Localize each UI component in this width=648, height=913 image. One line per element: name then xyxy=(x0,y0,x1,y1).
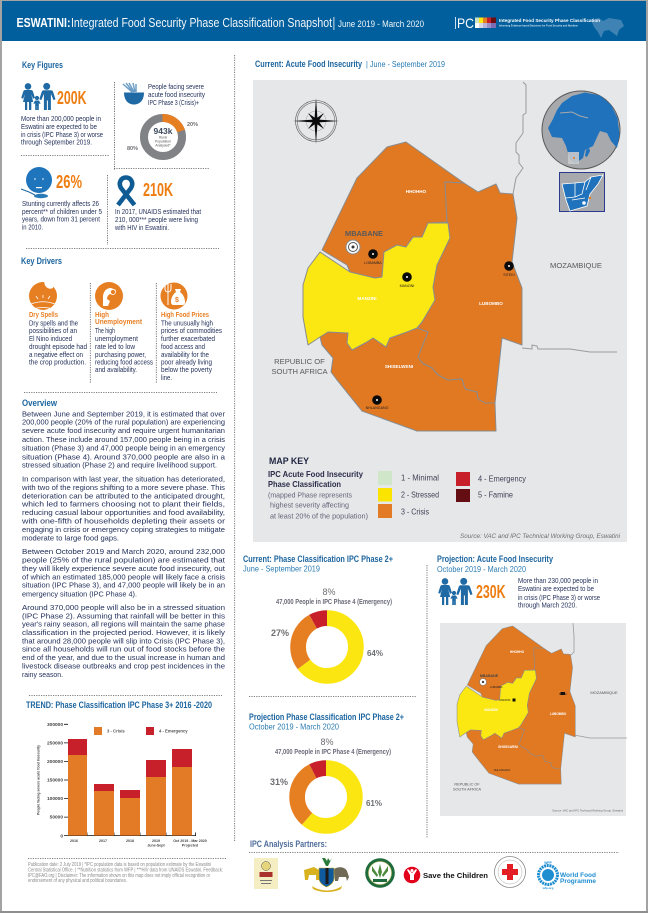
driver: dry spells: drought episode had xyxy=(29,342,87,351)
map key: IPC Acute Food Insecurity xyxy=(268,469,363,479)
map key: 5 - Famine xyxy=(478,490,514,500)
text: overview paragraph 1: severe acute food insecurity and require urgent humanitarian xyxy=(22,426,225,435)
text: overview paragraph 4 xyxy=(22,603,225,679)
globe locator xyxy=(542,91,620,169)
map key: 4 - Emergency xyxy=(478,474,526,484)
markers: small map cities xyxy=(480,678,565,702)
donut chart: projection: 8% xyxy=(320,737,334,747)
map labels: SHISELWENI xyxy=(385,364,413,369)
text: people facing severe: People facing severe xyxy=(148,82,204,91)
text: 200K explanation: in crisis (IPC Phase 3) or worse xyxy=(21,130,103,139)
icon: dry spells xyxy=(29,279,57,310)
heading: current classification xyxy=(243,554,393,574)
text: HIV: with HIV in Eswatini. xyxy=(114,223,169,232)
driver: high unemployment: reducing food access xyxy=(95,358,153,366)
heading: current classification: June - September 2019 xyxy=(243,564,320,574)
text: overview paragraph 4: end of the year, and due to the usual increase in human and xyxy=(22,653,225,662)
dotted layout dividers xyxy=(235,55,427,842)
chart legend: 3 - Crisis xyxy=(107,728,125,734)
panel: trend chart xyxy=(26,700,212,848)
map labels xyxy=(453,650,623,812)
text: 230K explanation: through March 2020. xyxy=(518,600,577,610)
text: overview paragraph 2: deterioration can be attributed to the anticipated drought, xyxy=(22,491,225,500)
donut: rural population: Analysed* xyxy=(155,144,171,148)
heading: current map: | June - September 2019 xyxy=(366,59,445,69)
logo: World Food Programme: WFP xyxy=(544,861,552,865)
map key xyxy=(268,456,526,520)
bar chart: Projected xyxy=(182,844,198,848)
stat: 230K: 230K xyxy=(476,582,506,602)
bar chart: June-Sept xyxy=(147,844,165,848)
map key: 1 - Minimal xyxy=(401,474,439,482)
driver: dry spells: El Nino induced xyxy=(29,334,72,343)
driver: high unemployment: and availability. xyxy=(95,365,137,374)
text: overview paragraph 4: livestock disease outbreaks and crop pest incidences in the xyxy=(22,662,225,671)
text: HIV xyxy=(114,207,201,232)
text: overview paragraph 4: Around 370,000 people will also be in a stressed situation xyxy=(22,603,225,612)
stat: 200K: 200K xyxy=(57,88,87,108)
city markers: MANZINI xyxy=(400,284,414,288)
icon: bowl of grain xyxy=(123,83,144,104)
map labels: SHISELWENI xyxy=(498,745,518,749)
bar chart: 300000 xyxy=(47,722,63,728)
text: overview paragraph 4: year's rainy season, all regions will maintain the same phase xyxy=(22,620,225,629)
text: overview paragraph 1: Between June and September 2019, it is estimated that over xyxy=(22,409,226,418)
heading: current map xyxy=(255,59,445,69)
map: Eswatini regions projected xyxy=(457,626,575,784)
logo: national emblem card xyxy=(254,858,278,889)
map labels: REPUBLIC OF xyxy=(454,782,480,786)
donut: rural population: 943k xyxy=(154,126,173,136)
date range: June 2019 - March 2020 xyxy=(338,19,424,29)
map labels: MOZAMBIQUE xyxy=(550,261,602,270)
text: overview paragraph 1 xyxy=(22,409,226,470)
footnote: endorsement of any physical and political boundaries. xyxy=(28,878,127,884)
text: stunting xyxy=(22,199,102,232)
bar chart: 0 xyxy=(60,834,63,840)
driver: high food prices: line. xyxy=(161,373,172,382)
city markers: LOBAMBA xyxy=(364,261,382,265)
title: ESWATINI: xyxy=(16,15,70,30)
driver: high food prices: further exacerbated xyxy=(161,334,215,343)
bar chart: Oct 2019 - Mar 2020 xyxy=(173,839,207,843)
text: 230K explanation: More than 230,000 people in xyxy=(518,576,598,585)
heading: trend: TREND: Phase Classification IPC Phase 3+ 2016 -2020 xyxy=(26,700,212,710)
subtitle: Integrated Food Security Phase Classification Snapshot xyxy=(71,15,332,30)
map key: at least 20% of the population) xyxy=(270,514,368,520)
text: overview paragraph 1: action. These include around 157,000 people being in a crisis xyxy=(22,435,225,444)
text: people facing severe xyxy=(148,82,205,107)
date range xyxy=(334,17,424,30)
map labels: NHLANGANO xyxy=(494,768,510,772)
international borders xyxy=(571,623,627,738)
donut chart: projection xyxy=(270,737,391,826)
driver: high unemployment: High xyxy=(95,310,109,319)
stat: 210K: 210K xyxy=(143,180,173,200)
map labels: SOUTH AFRICA xyxy=(453,788,481,792)
text: overview paragraph 1: situation (Phase 4). Around 370,000 people are also in a xyxy=(22,452,226,461)
map key: highest severity affecting xyxy=(270,502,349,510)
text: overview paragraph 3: they will likely experience severe acute food insecurity, out xyxy=(22,564,225,573)
map labels xyxy=(271,189,602,376)
heading: key figures: Key Figures xyxy=(22,60,63,70)
logo: World Food Programme xyxy=(538,861,597,890)
bar chart: 2017 xyxy=(99,839,107,843)
donut: rural population: 20% xyxy=(187,122,198,128)
text: overview paragraph 4: rainy season. xyxy=(22,670,63,679)
driver: high unemployment: purchasing power, xyxy=(95,350,146,359)
footnote: Publication date: 2 July 2019 | *IPC population data is based on population estimate by the Eswatini xyxy=(28,862,211,868)
IPC logo: PC xyxy=(457,15,474,31)
driver: high unemployment: Unemployment xyxy=(95,317,143,326)
text: overview paragraph 3: situation (IPC Phase 3), and 47,000 people will likely be in an xyxy=(22,581,225,590)
driver: dry spells xyxy=(29,310,87,366)
logo: Red Cross xyxy=(494,856,526,888)
text: overview paragraph 2: which led to farmers choosing not to plant their fields, xyxy=(21,500,225,509)
heading: projection: Projection: Acute Food Insecurity xyxy=(437,554,553,564)
map labels: MANZINI xyxy=(500,698,511,702)
map key: MAP KEY xyxy=(269,456,309,466)
heading: partners: IPC Analysis Partners: xyxy=(250,839,327,849)
panel: overview xyxy=(21,398,226,696)
logo: World Food Programme: World Food xyxy=(560,872,596,879)
text: people facing severe: acute food insecurity xyxy=(148,90,205,99)
driver: high unemployment: rate led to low xyxy=(95,342,136,351)
driver: dry spells: Dry Spells xyxy=(29,310,58,319)
driver: high food prices: food access and xyxy=(161,342,205,351)
map labels: MBABANE xyxy=(480,674,499,678)
panel: projection map xyxy=(437,554,627,816)
map source: Source: VAC and IPC Technical Working Group, Eswatini xyxy=(460,534,621,540)
panel: IPC analysis partners xyxy=(249,839,619,892)
IPC logo: Informing Evidence-based Decisions for Food Security and Nutrition xyxy=(499,24,578,28)
map key: Phase Classification xyxy=(268,479,341,489)
footnote: IPC@FAO.org | Disclaimer: The information shown on this map does not imply official recognition or xyxy=(28,873,210,879)
chart legend: 4 - Emergency xyxy=(159,728,188,734)
text: overview paragraph 3: Between October 2019 and March 2020, around 232,000 xyxy=(22,547,225,556)
heading: projection xyxy=(437,554,553,574)
international borders xyxy=(513,82,617,352)
map labels: SOUTH AFRICA xyxy=(271,367,328,376)
heading: projection: October 2019 - March 2020 xyxy=(437,564,526,574)
bar chart: 250000 xyxy=(47,740,63,746)
donut chart: projection: 61% xyxy=(366,799,382,808)
text: overview paragraph 2: engaging in crisis or emergency coping strategies to mitigate xyxy=(22,525,225,534)
icon: child face with spoon xyxy=(21,167,52,198)
donut: rural population: Rural xyxy=(159,136,167,140)
panel: current phase donut xyxy=(243,554,417,696)
bar chart: People facing severe acute food insecurity xyxy=(36,744,40,815)
text: overview paragraph 4: (IPC Phase 2). Assuming that rainfall will be better in this xyxy=(22,611,225,620)
map labels: MANZINI xyxy=(357,296,377,301)
donut chart: current xyxy=(271,587,392,676)
donut: rural population: Population xyxy=(155,140,171,144)
text: stunting: percent** of children under 5 xyxy=(22,207,102,216)
driver: high unemployment: unemployment xyxy=(95,334,138,343)
driver: high food prices: poor already living xyxy=(161,358,212,366)
logo: Eswatini coat of arms xyxy=(304,858,349,892)
map labels: MBABANE xyxy=(345,229,383,238)
logo: Save the Children: Save the Children xyxy=(423,871,488,880)
icon: family xyxy=(21,83,56,110)
map background xyxy=(440,623,626,816)
icon: HIV ribbon xyxy=(118,178,134,205)
bar chart: 2019 xyxy=(152,839,160,843)
icon: high unemployment xyxy=(95,282,123,310)
logo: World Food Programme: wfp.org xyxy=(542,886,554,890)
map key: (mapped Phase represents xyxy=(268,492,352,500)
map labels: MANZINI xyxy=(484,708,498,712)
text: overview paragraph 2: In comparison with last year, the situation has deteriorated, xyxy=(22,474,225,483)
donut chart: projection: 47,000 People in IPC Phase 4 (Emergency) xyxy=(275,747,391,756)
map labels: LOBAMBA xyxy=(490,685,503,689)
driver: high food prices: prices of commodities xyxy=(161,326,222,335)
text: overview paragraph 4: classification in the projected period. However, it is likely xyxy=(22,628,225,637)
heading: overview: Overview xyxy=(22,398,58,408)
map labels: REPUBLIC OF xyxy=(274,357,325,366)
driver: high unemployment: The high xyxy=(95,326,115,335)
city markers xyxy=(346,240,515,410)
text: overview paragraph 3 xyxy=(22,547,225,598)
text: stunting: Stunting currently affects 26 xyxy=(22,199,99,208)
text: overview paragraph 3: emergency situation (IPC Phase 4). xyxy=(22,589,137,598)
map background xyxy=(253,80,627,542)
city markers: SITEKI xyxy=(503,273,515,277)
city markers: NHLANGANO xyxy=(366,406,389,410)
donut chart: current: 64% xyxy=(367,649,383,658)
text: stunting: years, down from 31 percent xyxy=(22,214,100,224)
heading: projection classification: Projection Phase Classification IPC Phase 2+ xyxy=(249,712,404,722)
panel: current map xyxy=(253,59,627,542)
text: 200K explanation xyxy=(21,114,103,146)
driver: high food prices: availability for the xyxy=(161,350,209,359)
heading: projection classification xyxy=(249,712,404,732)
icon: family xyxy=(438,578,472,605)
heading: current map: Current: Acute Food Insecurity xyxy=(255,59,362,69)
map labels: LUBOMBO xyxy=(550,712,567,716)
donut chart: projection: 31% xyxy=(270,777,288,787)
panel: key figures xyxy=(21,60,219,248)
text: overview paragraph 1: stressed situation (Phase 2) and require livelihood support. xyxy=(22,461,217,470)
icon: high food prices: $ xyxy=(175,297,179,304)
map labels: HHOHHO xyxy=(406,189,427,194)
text: people facing severe: IPC Phase 3 (Crisis)+ xyxy=(148,98,199,107)
bar chart: 150000 xyxy=(47,778,63,784)
text: stunting: in 2010. xyxy=(22,222,43,232)
text: overview paragraph 3: people (25% of the rural population) are estimated that xyxy=(22,556,225,565)
map key: 2 - Stressed xyxy=(401,490,439,500)
map labels: SITEKI xyxy=(559,692,567,696)
text: overview paragraph 4: that around 28,000 people will slip into Crisis (IPC Phase 3), xyxy=(22,636,225,645)
text: overview paragraph 2: moderate to large food gaps. xyxy=(22,533,119,542)
text: overview paragraph 2: reducing casual labour opportunities and food availability, xyxy=(22,508,225,517)
logo: green round emblem xyxy=(365,858,395,888)
bar chart: 2016 xyxy=(70,839,78,843)
map labels: LUBOMBO xyxy=(479,301,503,306)
text: overview paragraph 4: since all households will run out of food stocks before the xyxy=(22,645,225,654)
map key: 3 - Crisis xyxy=(401,508,429,516)
driver: high food prices: High Food Prices xyxy=(161,310,209,319)
donut chart: current: 27% xyxy=(271,628,289,638)
map labels: MOZAMBIQUE xyxy=(590,690,618,695)
chart legend xyxy=(94,727,188,735)
driver: high unemployment xyxy=(95,310,153,374)
bar chart xyxy=(36,722,207,848)
bar chart: 50000 xyxy=(50,814,63,820)
text: 230K explanation: in crisis (IPC Phase 3) or worse xyxy=(518,593,600,602)
text: HIV: In 2017, UNAIDS estimated that xyxy=(115,207,201,216)
map labels: HHOHHO xyxy=(510,650,525,654)
bar chart: 200000 xyxy=(47,759,63,765)
stat: 26%: 26% xyxy=(56,172,82,192)
donut: rural population: 80% xyxy=(127,146,138,152)
text: 200K explanation: through September 2019. xyxy=(21,138,92,146)
icon: high food prices xyxy=(160,282,188,310)
logo: World Food Programme: Programme xyxy=(560,878,597,885)
donut: rural population xyxy=(127,118,198,156)
text: 230K explanation: Eswatini are expected to be xyxy=(518,584,594,593)
donut chart: current: 47,000 People in IPC Phase 4 (Emergency) xyxy=(276,597,392,606)
driver: high food prices: The unusually high xyxy=(161,318,213,327)
IPC logo: Integrated Food Security Phase Classification xyxy=(499,18,600,24)
donut chart: current: 8% xyxy=(322,587,336,597)
text: HIV: 210, 000*** people were living xyxy=(115,215,198,224)
heading: key drivers: Key Drivers xyxy=(21,256,62,266)
logo: Save the Children xyxy=(404,867,488,883)
driver: dry spells: a negative effect on xyxy=(29,350,83,359)
heading: current classification: Current: Phase Classification IPC Phase 2+ xyxy=(243,554,393,564)
text: overview paragraph 1: situation (Phase 3) and 47,000 people being in an emergency xyxy=(22,443,225,452)
bar chart: 2018 xyxy=(126,839,134,843)
text: overview paragraph 2: with one-fifth of households depleting their assets or xyxy=(21,517,226,526)
text: 200K explanation: Eswatini are expected to be xyxy=(21,122,97,131)
footnote: Central Statistical Office. | **Nutrition statistics from WFP | ***HIV data from UNAIDS Eswatini. Feedback: xyxy=(28,868,223,874)
map: Eswatini regions xyxy=(303,142,522,431)
heading: projection classification: October 2019 - March 2020 xyxy=(249,722,339,732)
bar chart: 100000 xyxy=(47,796,63,802)
text: 200K explanation: More than 200,000 people in xyxy=(21,114,101,123)
text: overview paragraph 1: 200,000 people (20% of the rural population) are experiencing xyxy=(22,418,225,427)
compass rose xyxy=(293,98,339,144)
text: overview paragraph 2 xyxy=(21,474,226,542)
IPC logo xyxy=(455,15,624,38)
panel: key drivers xyxy=(21,256,222,392)
map labels: Source: VAC and IPC Technical Working Group, Eswatini xyxy=(552,808,623,812)
inset: southern Africa xyxy=(560,172,604,212)
driver: dry spells: possibilities of an xyxy=(29,326,77,335)
panel: projection phase donut xyxy=(249,712,404,826)
text: overview paragraph 3: of which an estimated 185,000 people will likely face a crisis xyxy=(22,572,225,581)
driver: high food prices: below the poverty xyxy=(161,365,212,374)
text: overview paragraph 2: with two of the regions shifting to a more severe phase. This xyxy=(21,483,225,492)
driver: dry spells: the crop production. xyxy=(29,358,86,366)
header banner xyxy=(2,1,646,41)
driver: dry spells: Dry spells and the xyxy=(29,318,78,327)
driver: high food prices xyxy=(161,310,222,382)
footnote xyxy=(28,858,226,884)
text: 230K explanation xyxy=(518,576,600,610)
